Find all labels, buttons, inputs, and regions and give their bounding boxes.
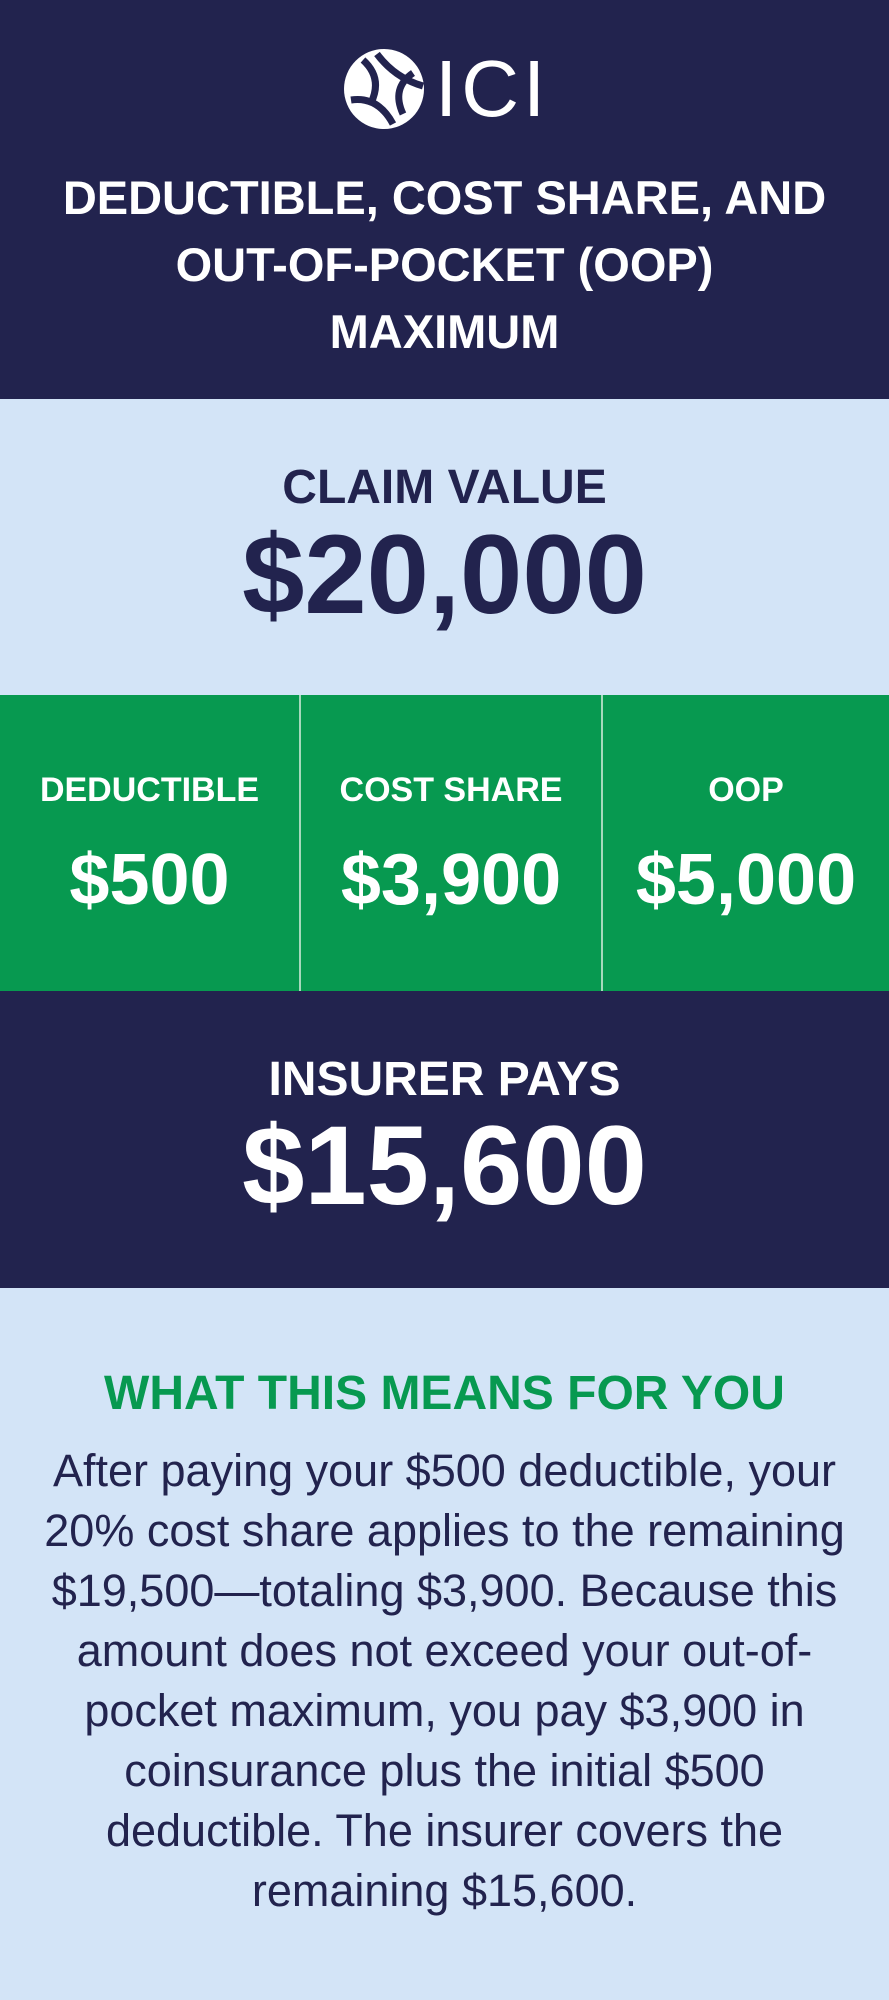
column: cost share: COST SHARE: [340, 771, 562, 809]
column: oop: [636, 771, 856, 920]
body text: deductible. The insurer covers the: [106, 1805, 783, 1856]
panel: insurer pays: [0, 991, 889, 1288]
body text: amount does not exceed your out-of-: [77, 1625, 812, 1676]
title: MAXIMUM: [330, 305, 559, 358]
body text: remaining $15,600.: [252, 1865, 637, 1916]
heading: WHAT THIS MEANS FOR YOU: [104, 1367, 785, 1420]
title: [63, 171, 826, 358]
body text: pocket maximum, you pay $3,900 in: [84, 1685, 805, 1736]
column: cost share: [301, 695, 603, 991]
column: deductible: $500: [69, 840, 230, 920]
body text: After paying your $500 deductible, your: [53, 1445, 836, 1496]
logo text: ICI: [435, 44, 549, 133]
insurer amount: $15,600: [242, 1103, 647, 1228]
panel: claim value: [0, 399, 889, 695]
title: DEDUCTIBLE, COST SHARE, AND: [63, 171, 826, 224]
body text: $19,500—totaling $3,900. Because this: [52, 1565, 837, 1616]
header panel: [0, 0, 889, 399]
insurer label: INSURER PAYS: [268, 1053, 621, 1106]
column: deductible: [0, 695, 301, 991]
claim label: CLAIM VALUE: [282, 461, 607, 514]
title: OUT-OF-POCKET (OOP): [176, 238, 713, 291]
panel: breakdown: [0, 695, 889, 991]
column: deductible: DEDUCTIBLE: [40, 771, 259, 809]
body text: [44, 1445, 845, 1916]
panel: explanation: [0, 1288, 889, 2000]
body text: 20% cost share applies to the remaining: [44, 1505, 845, 1556]
logo: [344, 44, 549, 133]
column: oop: $5,000: [636, 840, 856, 920]
icon: logo mark: [344, 49, 424, 129]
column: cost share: $3,900: [341, 840, 561, 920]
claim amount: $20,000: [242, 512, 647, 637]
column: oop: OOP: [708, 771, 784, 809]
body text: coinsurance plus the initial $500: [124, 1745, 765, 1796]
